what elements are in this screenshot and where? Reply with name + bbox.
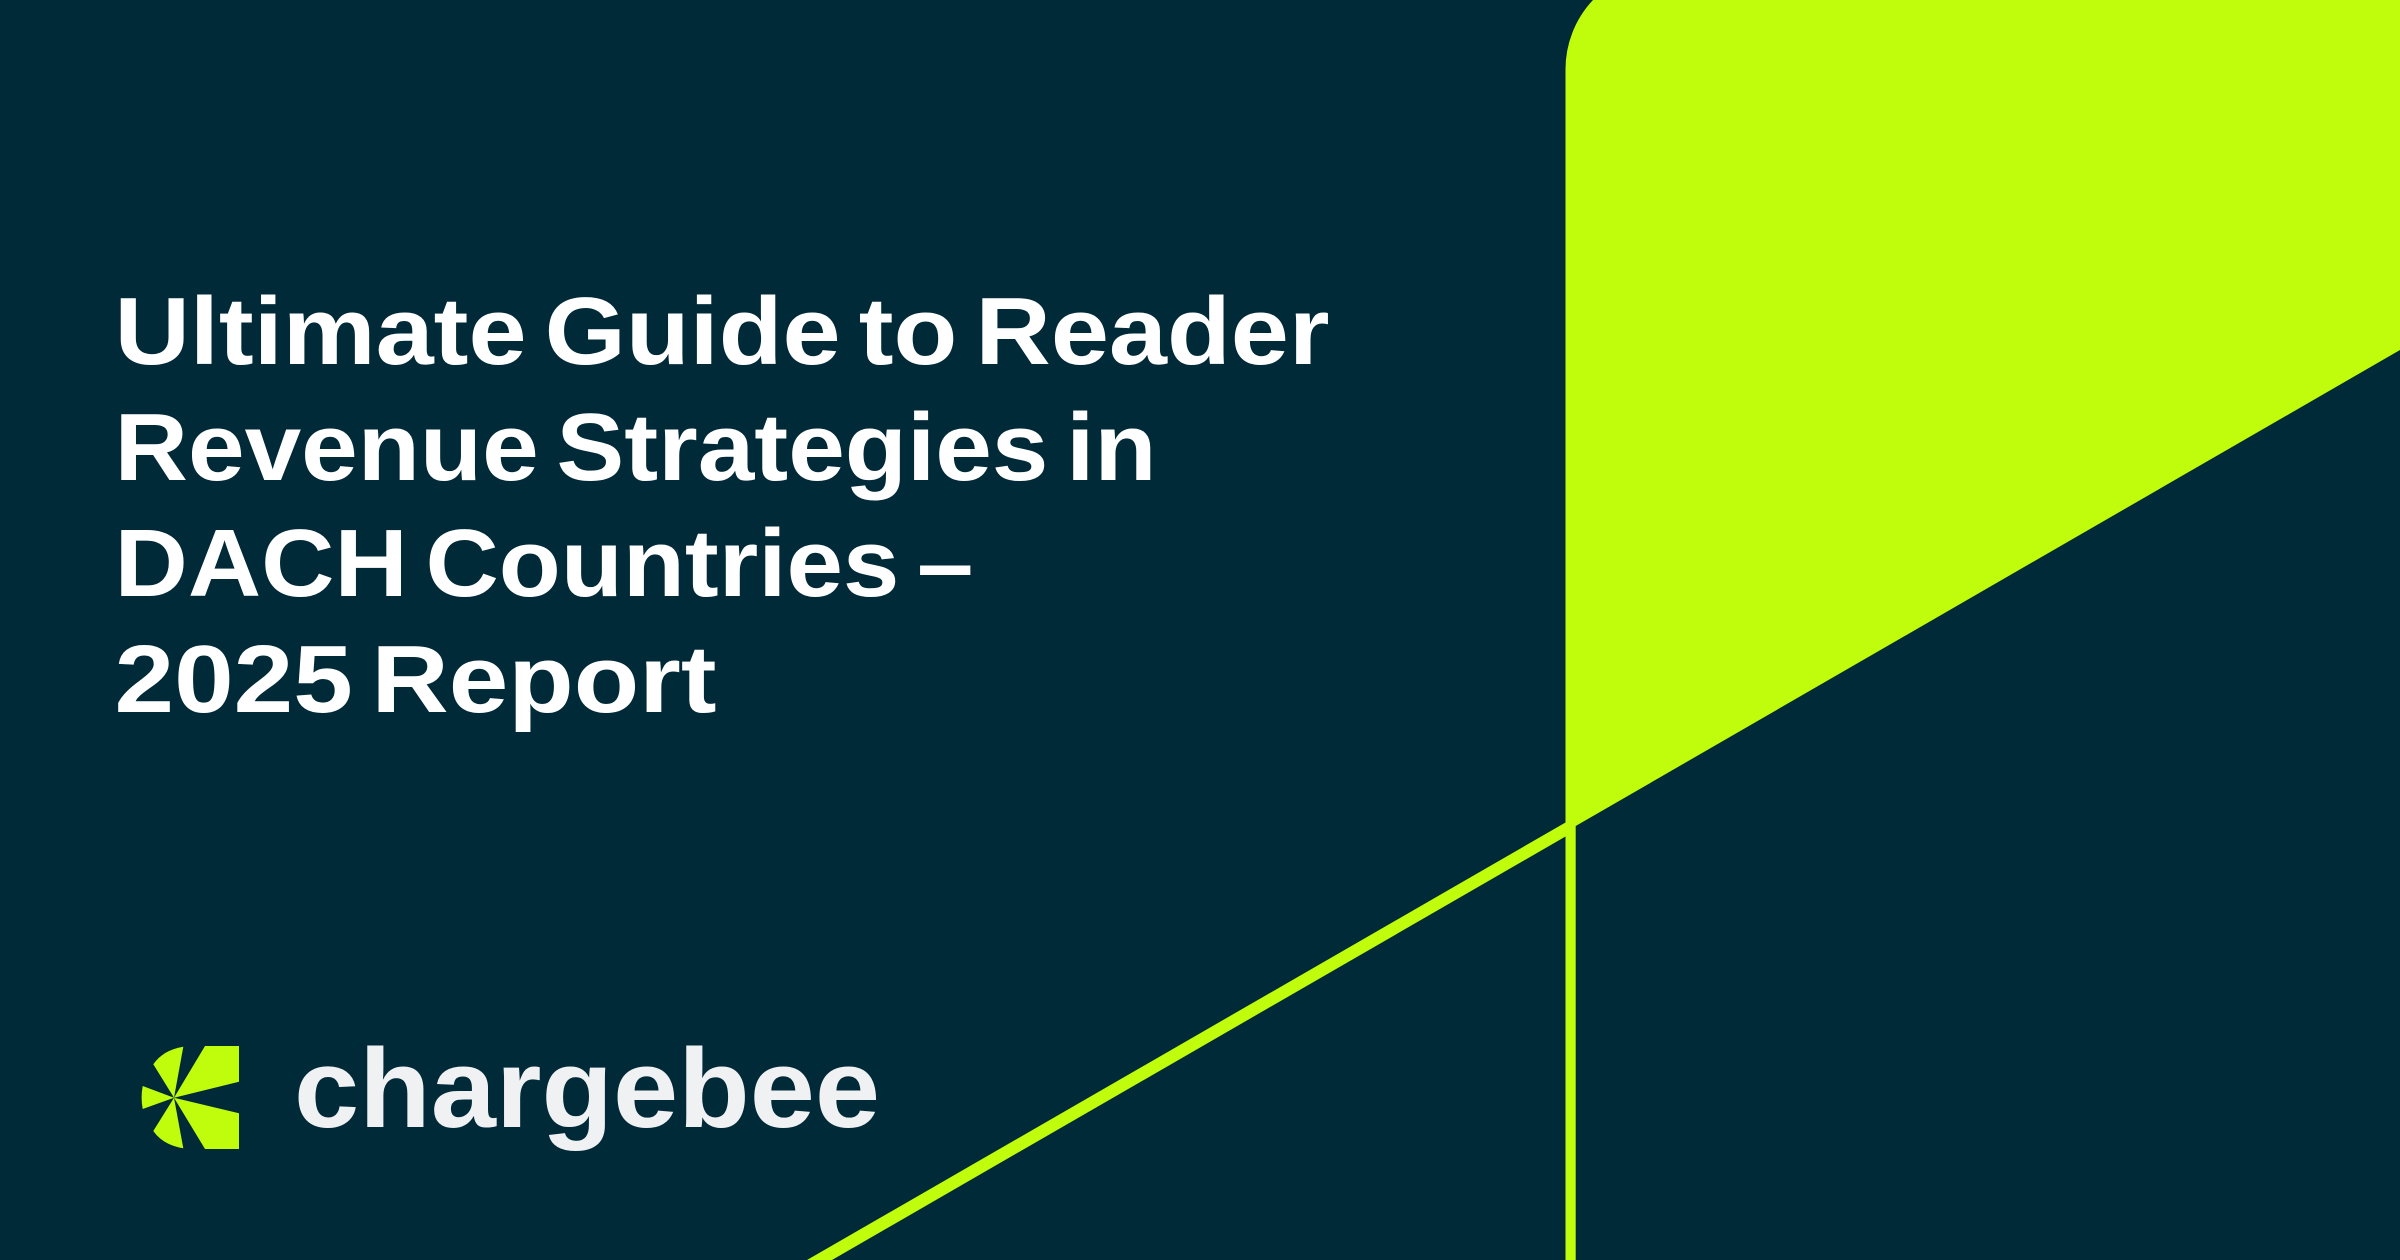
title: Ultimate Guide to Reader — [114, 278, 1330, 385]
wordmark: chargebee — [294, 1026, 880, 1151]
chargebee logo — [142, 1026, 880, 1151]
title — [114, 278, 1330, 733]
title: Revenue Strategies in — [114, 394, 1156, 501]
lime blade shape with vertical bar — [1565, 0, 2400, 1260]
title: 2025 Report — [114, 626, 716, 733]
icon: chargebee pinwheel mark — [142, 1046, 239, 1149]
diagonal lime band — [807, 822, 1566, 1260]
title: DACH Countries – — [114, 510, 974, 617]
